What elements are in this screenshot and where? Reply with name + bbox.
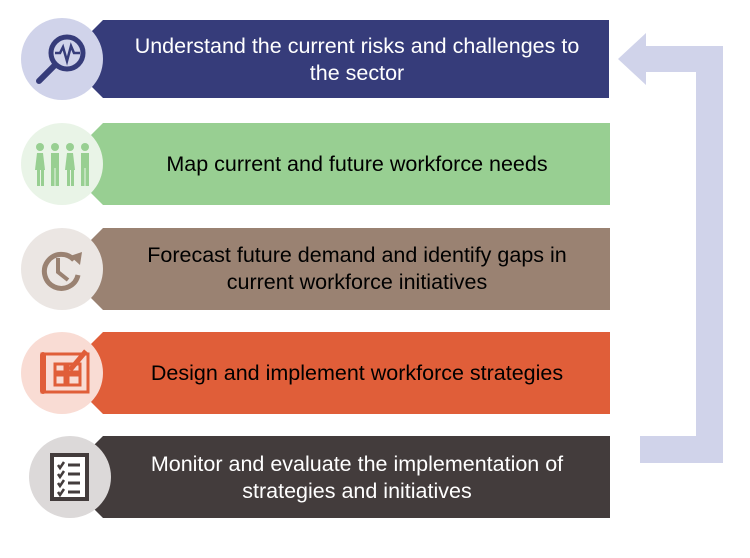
arrow: feedback loop (618, 33, 723, 463)
panel: step 5: strategies and initiatives (242, 479, 472, 503)
icon: clock (21, 228, 103, 310)
panel: step 2: Map current and future workforce needs (166, 152, 548, 176)
panel: step 5: Monitor and evaluate the implementation of (151, 452, 563, 476)
panel: step 3: current workforce initiatives (227, 270, 487, 294)
panel: step 1: the sector (310, 61, 404, 85)
panel: step 4 (85, 332, 610, 414)
icon: blueprint (21, 332, 103, 414)
panel: step 1: Understand the current risks and challenges to (135, 34, 579, 58)
icon: magnifier (21, 18, 103, 100)
icon: people (21, 123, 103, 205)
panel: step 3 (85, 228, 610, 310)
icon: checklist (29, 436, 111, 518)
panel: step 4: Design and implement workforce strategies (151, 361, 563, 385)
panel: step 3: Forecast future demand and identify gaps in (147, 243, 567, 267)
panel: step 5 (93, 436, 610, 518)
panel: step 2 (85, 123, 610, 205)
panel: step 1 (85, 20, 609, 98)
